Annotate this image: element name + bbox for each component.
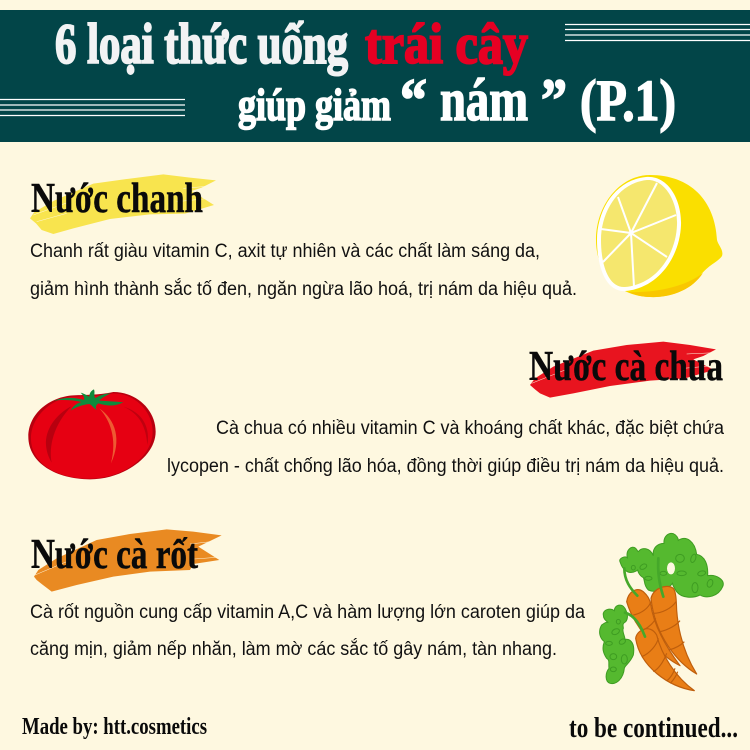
panel: carrot juice (30, 529, 723, 691)
title line 2: ” (541, 67, 567, 133)
title banner (0, 10, 750, 142)
text: carrot description: căng mịn, giảm nếp nhăn, làm mờ các sắc tố gây nám, tàn nhang. (30, 638, 557, 660)
text: carrot description: Cà rốt nguồn cung cấp vitamin A,C và hàm lượng lớn caroten giúp da (30, 602, 585, 623)
panel: lemon juice (30, 174, 722, 300)
text: tomato description: lycopen - chất chống lão hóa, đồng thời giúp điều trị nám da hiệu quả. (167, 456, 724, 477)
panel: tomato juice (28, 342, 724, 479)
text: lemon description: giảm hình thành sắc tố đen, ngăn ngừa lão hoá, trị nám da hiệu quả. (30, 278, 577, 300)
title line 1: 6 loại thức uống (55, 13, 348, 76)
title line 2: “ (400, 67, 427, 133)
title line 2: nám (440, 67, 528, 133)
text: lemon description: Chanh rất giàu vitamin C, axit tự nhiên và các chất làm sáng da, (30, 241, 540, 262)
title line 2: (P.1) (580, 68, 676, 133)
heading: Nước chanh: Nước chanh (31, 176, 203, 222)
text: tomato description: Cà chua có nhiều vitamin C và khoáng chất khác, đặc biệt chứa (216, 418, 724, 439)
title line 2: giúp giảm (238, 79, 391, 130)
icon: lemon (596, 175, 722, 297)
text: lemon description (30, 241, 577, 300)
brush stroke: yellow (30, 174, 216, 234)
heading: Nước cà rốt: Nước cà rốt (31, 532, 198, 578)
text: tomato description (167, 418, 724, 477)
icon: tomato (28, 389, 156, 479)
text: carrot description (30, 602, 585, 660)
brush stroke: orange (34, 529, 222, 592)
icon: carrots (600, 533, 723, 691)
title line 2 (238, 67, 676, 133)
brush stroke: red (530, 342, 716, 398)
title line 1: trái cây (365, 13, 528, 76)
footer: credit: Made by: htt.cosmetics (22, 714, 207, 740)
